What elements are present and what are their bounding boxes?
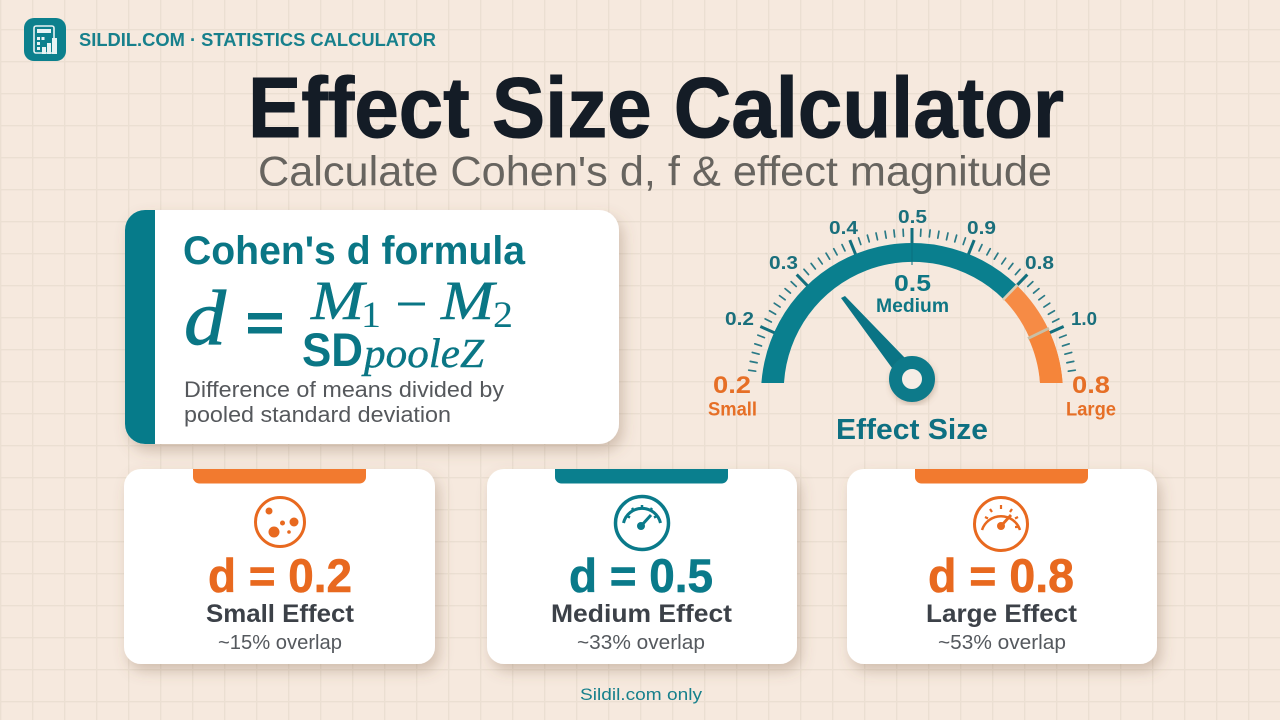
gauge arc: teal section: [761, 243, 1017, 383]
panel: large effect: [847, 469, 1157, 664]
top tab: [915, 469, 1088, 484]
gauge scale labels: 0.8: [1025, 252, 1054, 273]
header brand: [24, 18, 436, 61]
gauge small label: 0.2: [713, 372, 751, 399]
gauge centre reading: [876, 270, 949, 317]
subtitle: Calculate Cohen's d, f & effect magnitude: [258, 148, 1052, 194]
label: Medium Effect: [551, 600, 733, 628]
formula: M: [310, 270, 368, 331]
value: d = 0.5: [569, 549, 713, 602]
gauge scale labels: 0.3: [769, 252, 798, 273]
formula description: Difference of means divided by: [184, 377, 505, 402]
gauge minor ticks: [749, 229, 1075, 371]
formula: 2: [493, 295, 513, 336]
overlap: ~15% overlap: [218, 632, 342, 654]
top tab: [193, 469, 366, 484]
value: d = 0.8: [928, 549, 1074, 602]
icon: dots in circle: [256, 498, 304, 546]
gauge major ticks: [760, 228, 1064, 335]
formula: SD: [302, 323, 363, 376]
formula heading: Cohen's d formula: [183, 229, 526, 273]
panel: Cohen's d formula: [125, 210, 619, 444]
gauge caption: Effect Size: [836, 414, 988, 446]
gauge arc: orange section: [1004, 285, 1063, 383]
gauge scale labels: 0.5: [898, 206, 927, 227]
gauge centre reading: Medium: [876, 296, 949, 317]
gauge large label: 0.8: [1072, 372, 1110, 399]
overlap: ~33% overlap: [577, 632, 705, 654]
icon: speedometer: [974, 498, 1028, 550]
panel: medium effect: [487, 469, 797, 664]
icon: calculator: [24, 18, 66, 61]
gauge large label: [1066, 372, 1116, 420]
value: d = 0.2: [208, 549, 352, 602]
label: Small Effect: [206, 600, 355, 628]
gauge small label: [708, 372, 757, 420]
label: Large Effect: [926, 600, 1078, 628]
panel: small effect: [124, 469, 435, 664]
formula: 1: [361, 295, 381, 336]
icon: speedometer: [616, 496, 668, 550]
formula: [184, 270, 513, 376]
gauge centre reading: 0.5: [894, 270, 931, 296]
gauge scale labels: 0.4: [829, 217, 859, 238]
chart: effect size gauge: [708, 206, 1116, 446]
formula: M: [440, 270, 498, 331]
gauge small label: Small: [708, 398, 757, 420]
gauge scale labels: 1.0: [1071, 308, 1097, 329]
brand text: SILDIL.COM · STATISTICS CALCULATOR: [79, 29, 436, 50]
formula: d: [184, 274, 227, 361]
title: Effect Size Calculator: [248, 61, 1064, 156]
footer note: Sildil.com only: [580, 685, 703, 704]
gauge needle: [841, 296, 928, 396]
gauge scale labels: 0.9: [967, 217, 996, 238]
gauge large label: Large: [1066, 398, 1116, 420]
gauge scale labels: [725, 206, 1097, 329]
overlap: ~53% overlap: [938, 632, 1066, 654]
top tab: [555, 469, 728, 484]
gauge scale labels: 0.2: [725, 308, 754, 329]
formula description: pooled standard deviation: [184, 402, 451, 427]
formula: pooleZ: [361, 330, 485, 376]
